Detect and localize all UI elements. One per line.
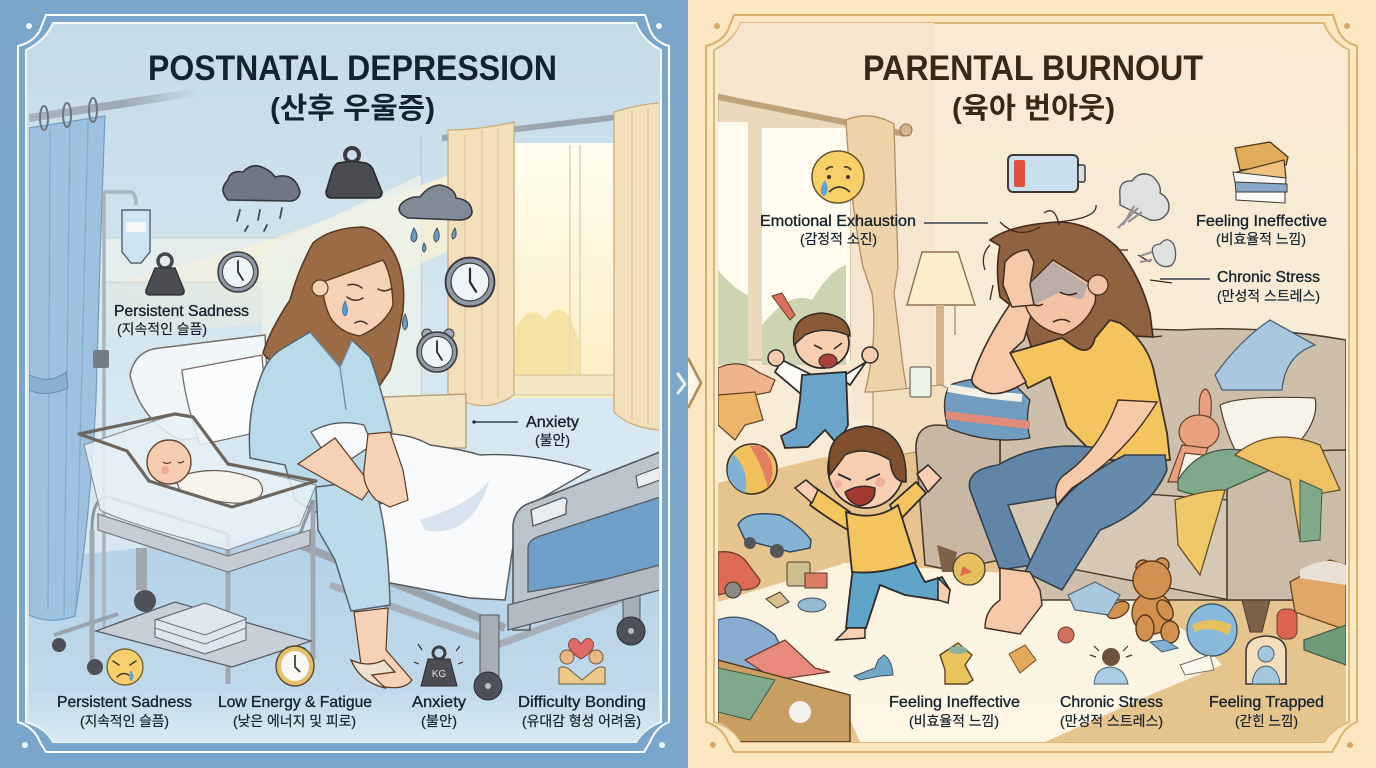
sunlight beam (90, 175, 450, 340)
stray hair strands (983, 205, 1172, 337)
bunny toy (1168, 389, 1219, 482)
beach ball (727, 444, 777, 494)
label: feeling ineffective upper: (비효율적 느낌) (1216, 231, 1306, 247)
label: feeling ineffective (889, 694, 1020, 729)
label: anxiety with pointer: (불안) (535, 432, 570, 448)
label: chronic stress: Chronic Stress (1060, 694, 1163, 711)
label: persistent sadness upper: Persistent Sadness (114, 303, 249, 320)
round toy (953, 553, 985, 585)
arms (810, 482, 926, 530)
icon: clock one (218, 252, 258, 292)
orange cloth (718, 392, 763, 440)
raised arm (972, 300, 1034, 394)
label: anxiety (412, 694, 466, 729)
wall shade (718, 20, 934, 420)
rug (718, 563, 1222, 742)
label: emotional exhaustion: Emotional Exhaustion (760, 213, 916, 230)
label: anxiety: (불안) (421, 713, 457, 729)
lamp (907, 252, 975, 405)
scene: hospital room (29, 92, 660, 742)
label: anxiety: Anxiety (412, 694, 466, 711)
hair behind (990, 222, 1153, 373)
bed rail (300, 545, 505, 628)
icon: falling tear (402, 314, 408, 330)
green book (1304, 625, 1346, 665)
blue throw (1215, 320, 1315, 390)
window (718, 94, 850, 365)
curtain fold lines (465, 108, 648, 425)
label: persistent sadness: Persistent Sadness (57, 694, 192, 711)
label: chronic stress upper: Chronic Stress (1217, 269, 1320, 286)
shirt (1010, 320, 1170, 460)
cardboard box (718, 660, 850, 742)
toy blocks (766, 562, 827, 612)
icon: kg weight: KG (432, 669, 446, 680)
red bottle (1277, 609, 1297, 639)
icon: dark cloud two (399, 185, 472, 252)
label: feeling ineffective upper (1196, 213, 1327, 247)
korean title: (육아 번아웃) (952, 92, 1115, 125)
gown (249, 332, 392, 520)
label: feeling ineffective: Feeling Ineffective (889, 694, 1020, 711)
hands (768, 350, 784, 366)
rattle toy (1187, 604, 1237, 656)
arrow: divider chevrons (678, 358, 702, 408)
curtain: right window left (448, 122, 514, 406)
label: chronic stress (1060, 694, 1163, 729)
panel: parental burnout background (688, 0, 1376, 768)
toddler standing (768, 313, 878, 448)
label: emotional exhaustion (760, 213, 988, 247)
clothes pile bottom left (718, 617, 830, 680)
cart tray (98, 514, 310, 572)
label: low energy and fatigue (218, 694, 372, 729)
label: feeling trapped: Feeling Trapped (1209, 694, 1324, 711)
frame: left ornate border (18, 15, 669, 752)
icon: person trapped in arch (1246, 636, 1286, 684)
icon: sad emoji (812, 151, 864, 203)
icon: kg weight (414, 644, 463, 686)
bed sheet (380, 433, 592, 601)
label: anxiety with pointer (472, 414, 579, 448)
exhausted grey shading (1028, 262, 1088, 305)
label: chronic stress: (만성적 스트레스) (1060, 713, 1163, 729)
teddy bear (1104, 558, 1179, 643)
label: persistent sadness (57, 694, 192, 729)
big toddler crying (795, 426, 950, 640)
icon: crying face (107, 649, 143, 685)
ear (1088, 275, 1108, 295)
label: low energy and fatigue: Low Energy & Fatigue (218, 694, 372, 711)
laundry stack (944, 378, 1030, 440)
panel: postnatal depression background (0, 0, 688, 768)
wall divider (420, 135, 422, 395)
IV pole (52, 190, 150, 652)
toy bus (738, 514, 811, 558)
hands (364, 432, 408, 507)
label: low energy and fatigue: (낮은 에너지 및 피로) (233, 713, 356, 729)
icon: yellow toy (940, 643, 973, 684)
small floor toys (854, 627, 1214, 680)
overalls (781, 372, 848, 448)
head (795, 318, 849, 368)
baby head (147, 440, 191, 484)
sideboard (873, 385, 975, 455)
curtain rod left (29, 92, 198, 118)
footboard (513, 452, 660, 630)
wall panel (88, 238, 283, 282)
label: difficulty bonding (518, 694, 646, 729)
curtain (846, 116, 907, 392)
icon: weight small (146, 254, 184, 295)
folded towels (155, 603, 246, 654)
label: emotional exhaustion: (감정적 소진) (800, 231, 877, 247)
korean title: (산후 우울증) (270, 92, 435, 125)
curtain rings (40, 98, 97, 130)
face (1024, 260, 1096, 335)
label: chronic stress upper: (만성적 스트레스) (1217, 288, 1320, 304)
clear bassinet (84, 414, 316, 550)
window (510, 143, 620, 398)
mouth (845, 486, 875, 506)
swaddle (175, 470, 262, 503)
label: difficulty bonding: Difficulty Bonding (518, 694, 646, 711)
ear (312, 280, 328, 296)
icon: IV bag (122, 210, 150, 263)
icon: clock two (446, 258, 494, 306)
bed (130, 335, 660, 700)
curtain rod (718, 97, 905, 134)
low cabinet (718, 375, 860, 485)
mattress back pillow (130, 335, 270, 440)
head (828, 428, 904, 508)
arm (298, 438, 372, 500)
label: feeling ineffective: (비효율적 느낌) (909, 713, 999, 729)
lower leg and foot (354, 608, 412, 688)
hand on head (1003, 250, 1034, 307)
woman in hospital gown (249, 227, 412, 688)
sleeve cuff (310, 422, 368, 460)
panel: parental burnout (706, 15, 1357, 752)
face features (1030, 292, 1077, 322)
label: feeling trapped: (갇힌 느낌) (1235, 713, 1298, 729)
label: chronic stress upper (1160, 269, 1320, 304)
foot (836, 628, 865, 640)
curtain: right window right (614, 103, 660, 430)
hair back (263, 227, 404, 385)
red toy clothes peg (772, 293, 795, 320)
right leg jeans (1025, 455, 1167, 590)
torso (846, 505, 916, 573)
label: persistent sadness: (지속적인 슬픔) (80, 713, 169, 729)
pants (316, 480, 390, 611)
frame: right ornate border (706, 15, 1357, 752)
feet (985, 568, 1042, 634)
bassinet cart (79, 414, 316, 684)
floor (718, 440, 950, 742)
hamper (1290, 560, 1346, 630)
resting arm (1056, 400, 1157, 505)
icon: stressed person (1090, 646, 1132, 684)
icon: parent and child heart (559, 638, 605, 684)
icon: alarm clock (417, 329, 457, 372)
light blue cloth (1068, 582, 1120, 615)
trousers (846, 558, 950, 628)
glass (910, 367, 931, 397)
nightstand (384, 394, 466, 448)
sleeves (775, 360, 866, 395)
bed legs (480, 615, 499, 677)
icon: dark cloud one (223, 166, 300, 231)
face (323, 260, 393, 336)
title: PARENTAL BURNOUT (863, 49, 1203, 88)
label: persistent sadness upper (114, 303, 249, 337)
label: persistent sadness upper: (지속적인 슬픔) (117, 321, 207, 337)
scene: messy living room (718, 20, 1346, 742)
curtain rod right (442, 114, 614, 141)
face features (347, 284, 392, 324)
sofa (916, 320, 1346, 632)
woman burned out (969, 205, 1172, 634)
label: feeling ineffective upper: Feeling Ineffective (1196, 213, 1327, 230)
left leg jeans (969, 446, 1100, 570)
panel: postnatal depression (18, 15, 669, 752)
title: POSTNATAL DEPRESSION (148, 49, 557, 88)
red toy car (718, 552, 760, 598)
label: anxiety with pointer: Anxiety (526, 414, 579, 431)
label: feeling trapped (1209, 694, 1324, 729)
icon: low battery (1008, 155, 1085, 192)
peach clothes pile (718, 364, 775, 397)
sofa pillow (1220, 397, 1316, 450)
icon: steam puff large (1118, 174, 1169, 228)
icon: gold clock (276, 646, 314, 686)
icon: weight large (326, 148, 382, 198)
wall lower lit area (262, 175, 421, 400)
left curtain (29, 116, 105, 620)
bassinet rim (79, 414, 316, 507)
yellow and green blankets (1175, 437, 1340, 575)
floor (29, 530, 660, 742)
label: difficulty bonding: (유대감 형성 어려움) (522, 713, 641, 729)
icon: stack of papers (1233, 142, 1288, 203)
icon: steam puff small (1140, 240, 1176, 267)
